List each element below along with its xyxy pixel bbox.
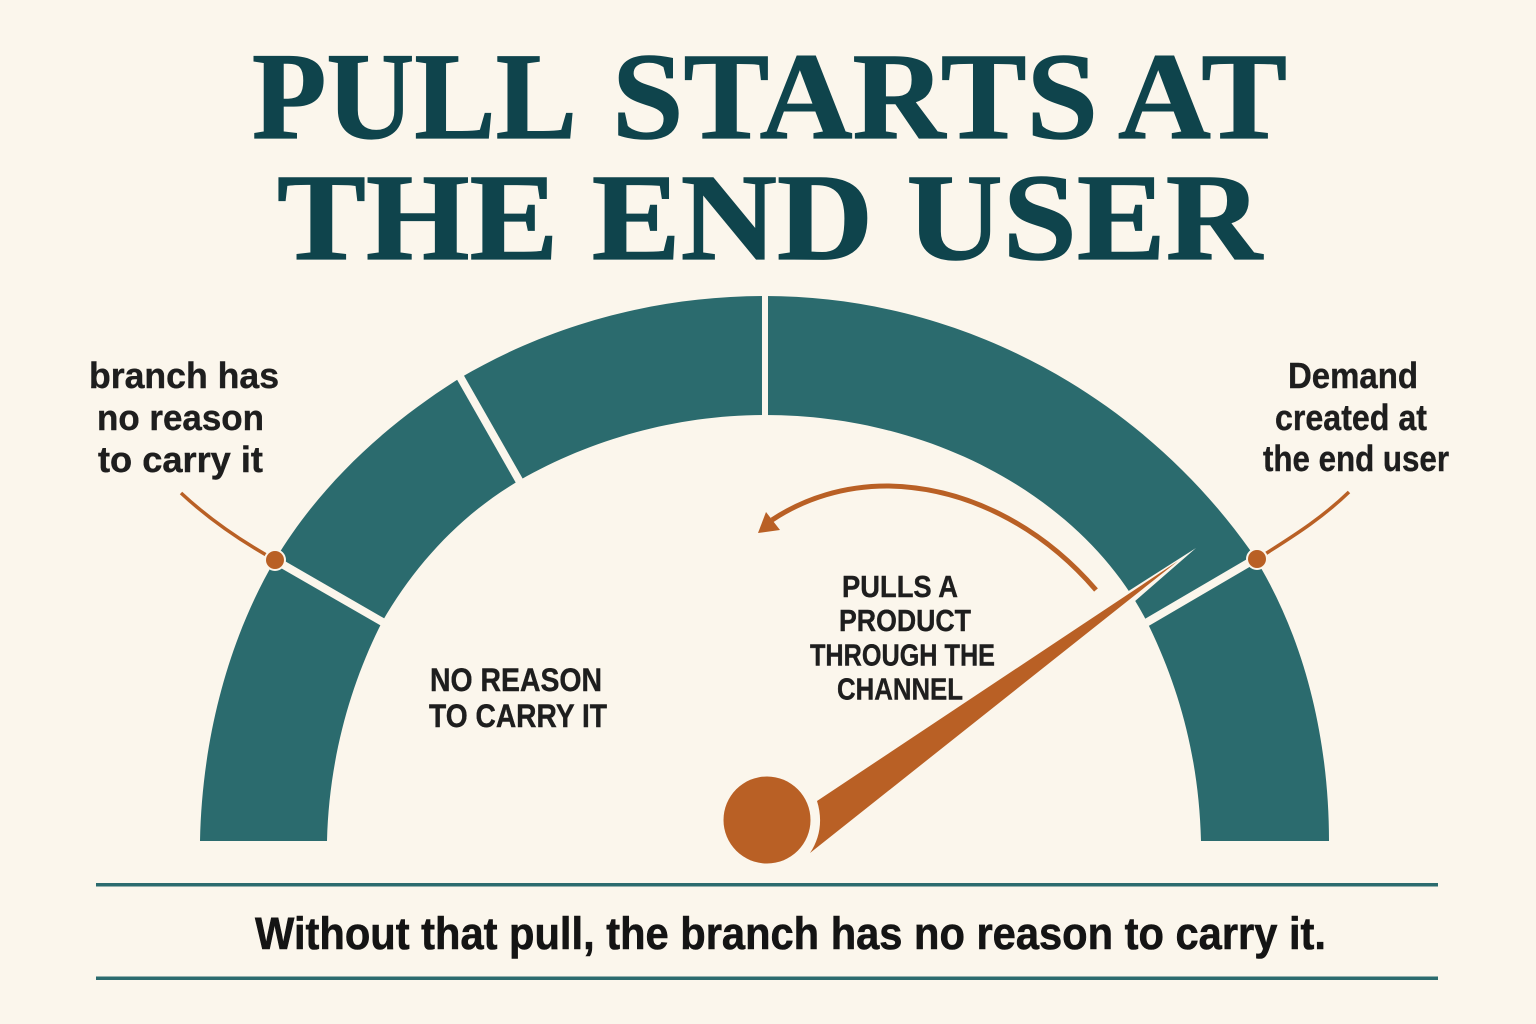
right callout: created at: [1275, 397, 1427, 438]
label: pulls a product: CHANNEL: [837, 672, 963, 706]
title: THE END USER: [277, 149, 1264, 286]
label: no reason: NO REASON: [430, 662, 602, 698]
title: [252, 28, 1287, 286]
gauge segment dividers: [268, 290, 1262, 624]
left callout: branch has: [89, 355, 279, 396]
label: pulls a product: PRODUCT: [839, 603, 971, 638]
label: no reason: [429, 662, 607, 734]
title: AT: [1118, 28, 1287, 165]
right callout: the end user: [1263, 438, 1449, 479]
needle: [724, 548, 1196, 864]
label: pulls a product: [810, 569, 995, 706]
title: PULL: [252, 28, 577, 165]
needle hub: [724, 776, 810, 864]
label: pulls a product: PULLS A: [842, 569, 958, 604]
label: pulls a product: THROUGH THE: [810, 638, 995, 672]
left callout: no reason: [97, 397, 264, 438]
curved arrow: [758, 486, 1096, 590]
footer statement: Without that pull, the branch has no reason to carry it.: [255, 908, 1326, 959]
right callout: [1246, 355, 1449, 570]
title: STARTS: [612, 28, 1098, 165]
left callout: to carry it: [98, 439, 263, 480]
footer statement: [96, 883, 1438, 980]
right callout: Demand: [1288, 355, 1418, 396]
label: no reason: TO CARRY IT: [429, 698, 607, 734]
left callout: [89, 355, 286, 571]
gauge arc: [200, 290, 1329, 841]
